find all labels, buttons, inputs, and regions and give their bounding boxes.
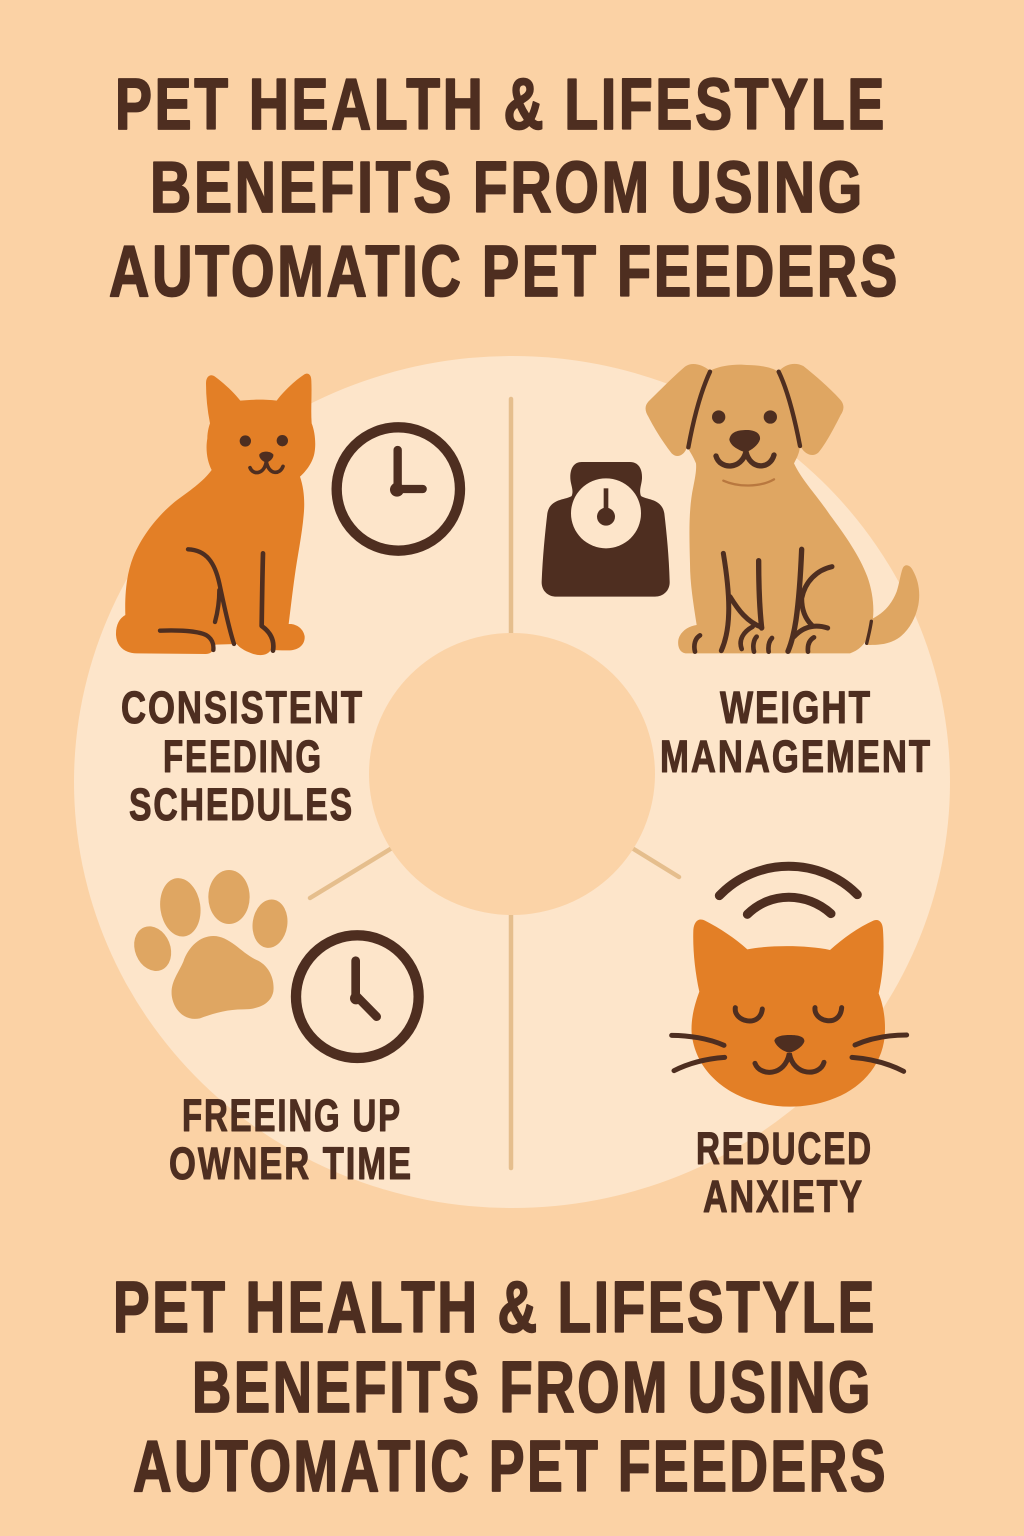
panel: benefits wheel xyxy=(74,356,950,1208)
label: weight management: MANAGEMENT xyxy=(660,731,932,782)
label: weight management: WEIGHT xyxy=(720,682,872,733)
label: consistent feeding schedules: FEEDING xyxy=(163,731,323,782)
icon: calm sleeping cat with sound waves xyxy=(672,866,907,1107)
label: consistent feeding schedules: CONSISTENT xyxy=(121,682,364,733)
icon: clock at five o'clock xyxy=(296,935,419,1058)
title xyxy=(109,65,900,312)
label: freeing up owner time xyxy=(169,1090,413,1189)
icon: tan paw print xyxy=(128,870,291,1019)
label: reduced anxiety xyxy=(696,1123,873,1222)
label: freeing up owner time: OWNER TIME xyxy=(169,1138,413,1189)
label: consistent feeding schedules: SCHEDULES xyxy=(129,779,354,830)
icon: kitchen weight scale xyxy=(542,462,670,597)
icon: sitting orange cat xyxy=(116,374,315,655)
label: reduced anxiety: ANXIETY xyxy=(703,1171,864,1222)
label: weight management xyxy=(660,682,932,782)
label: freeing up owner time: FREEING UP xyxy=(182,1090,402,1141)
label: reduced anxiety: REDUCED xyxy=(696,1123,873,1174)
footer title xyxy=(113,1268,888,1507)
icon: sitting tan dog xyxy=(646,364,919,653)
icon: clock at three o'clock xyxy=(337,427,460,551)
label: consistent feeding schedules xyxy=(121,682,364,830)
